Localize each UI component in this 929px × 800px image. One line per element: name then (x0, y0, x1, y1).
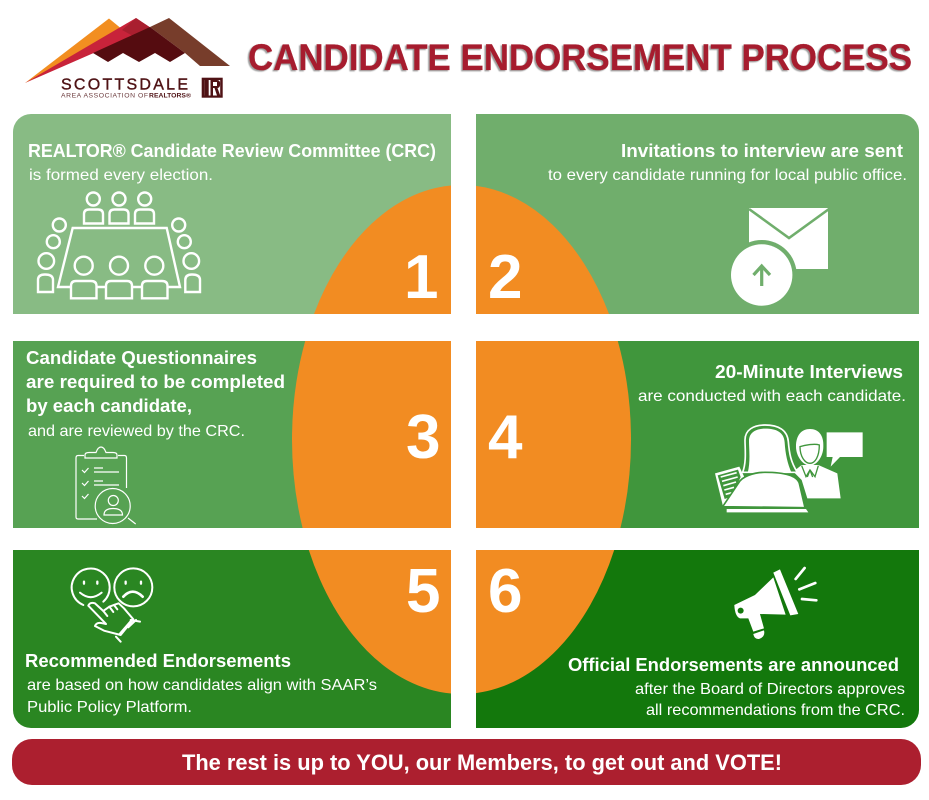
panel: step 5: Recommended Endorsements (25, 651, 291, 671)
icon: megaphone (734, 568, 816, 639)
icon: interview (715, 425, 863, 512)
panel: step 1: REALTOR® Candidate Review Committee (CRC) (28, 141, 436, 161)
number 6: 6 (488, 557, 522, 626)
panel: step 6 (476, 550, 919, 728)
panel: step 2: to every candidate running for local public office. (548, 167, 907, 184)
panel: step 5 (13, 550, 451, 728)
panel: step 3: and are reviewed by the CRC. (28, 423, 245, 440)
panel: step 1: is formed every election. (29, 167, 213, 184)
panel: step 5: Public Policy Platform. (27, 699, 192, 716)
panel: step 3: by each candidate, (26, 396, 192, 416)
panel: step 5: are based on how candidates align with SAAR’s (27, 677, 377, 694)
panel: step 4: are conducted with each candidate. (638, 388, 906, 405)
number 4: 4 (488, 403, 523, 472)
panel: step 3: Candidate Questionnaires (26, 348, 257, 368)
number 5: 5 (406, 557, 440, 626)
panel: step 4 (476, 341, 919, 528)
panel: step 4: 20-Minute Interviews (715, 362, 903, 382)
panel: step 6: after the Board of Directors approves (635, 681, 905, 698)
logo: Scottsdale Area Association of Realtors (25, 18, 230, 100)
panel: step 3: are required to be completed (26, 372, 285, 392)
number 3: 3 (406, 403, 440, 472)
number 1: 1 (404, 243, 438, 312)
icon: clipboard with magnifier (76, 447, 136, 524)
icon: smiley and frown faces with pointing hand (72, 568, 152, 642)
panel: step 2 (476, 114, 919, 314)
logo: Scottsdale Area Association of Realtors: REALTORS® (149, 92, 191, 100)
number 2: 2 (488, 243, 522, 312)
panel: step 1 (13, 114, 451, 314)
panel: step 2: Invitations to interview are sent (621, 141, 903, 161)
icon: meeting table (38, 192, 200, 298)
panel: step 3 (13, 341, 451, 528)
icon: envelope with upload arrow (727, 208, 829, 310)
panel: step 6: all recommendations from the CRC. (646, 702, 905, 719)
banner: call to vote (12, 739, 921, 785)
banner: call to vote: The rest is up to YOU, our Members, to get out and VOTE! (182, 750, 782, 775)
logo: Scottsdale Area Association of Realtors: SCOTTSDALE (61, 76, 188, 94)
panel: step 6: Official Endorsements are announced (568, 655, 899, 675)
logo: Scottsdale Area Association of Realtors: AREA ASSOCIATION OF (61, 92, 148, 100)
